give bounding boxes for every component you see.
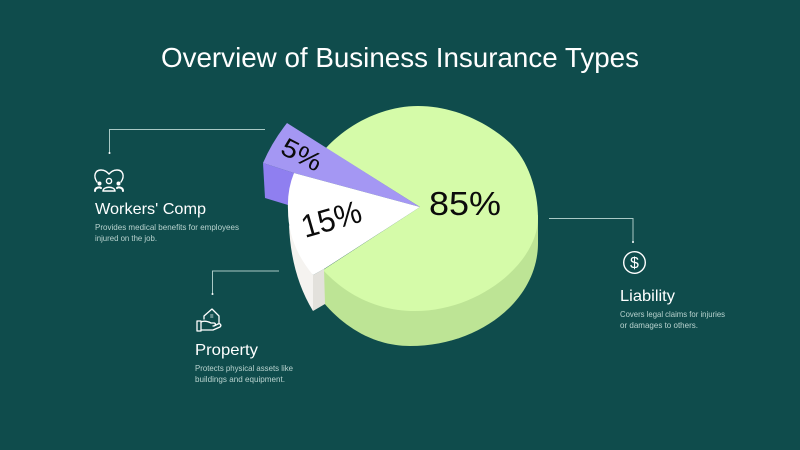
text: property <box>195 342 293 384</box>
white slice edge <box>313 269 325 311</box>
connector: workers comp <box>108 130 265 154</box>
icon: liability <box>624 252 645 273</box>
text: property: Protects physical assets like <box>195 363 293 373</box>
white slice side <box>289 225 313 311</box>
pie chart <box>263 106 538 346</box>
text: workers comp: injured on the job. <box>95 233 157 243</box>
text: liability: Covers legal claims for injuries <box>620 309 725 319</box>
connector: liability <box>549 218 634 243</box>
label 5%: 5% <box>276 132 327 177</box>
text: property: Property <box>195 342 258 359</box>
purple slice side <box>263 163 294 205</box>
purple slice top: 5% <box>263 123 420 207</box>
green slice side <box>323 215 538 346</box>
text: liability <box>620 288 725 330</box>
green slice top: 85% <box>323 106 538 311</box>
icon: liability: $ <box>630 255 639 272</box>
text: liability: Liability <box>620 288 675 305</box>
text: workers comp <box>95 201 239 243</box>
icon: property <box>197 309 221 331</box>
text: workers comp: Provides medical benefits for employees <box>95 222 239 232</box>
text: property: buildings and equipment. <box>195 374 285 384</box>
white slice top: 15% <box>288 173 420 275</box>
icon: workers comp <box>95 170 123 191</box>
connector: property <box>212 271 279 295</box>
title: Overview of Business Insurance Types <box>161 42 639 73</box>
text: liability: or damages to others. <box>620 320 698 330</box>
label 15%: 15% <box>297 193 366 245</box>
label 85%: 85% <box>429 185 501 222</box>
text: workers comp: Workers' Comp <box>95 201 206 218</box>
